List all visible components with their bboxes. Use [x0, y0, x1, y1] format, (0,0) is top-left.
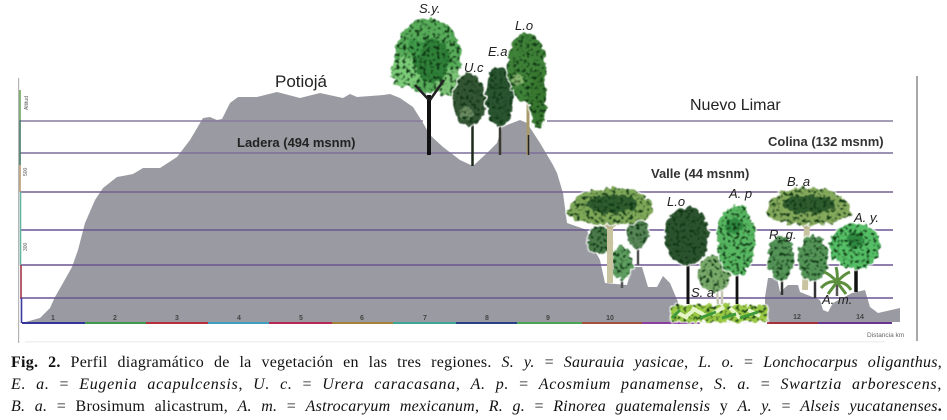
region label: Ladera: Ladera (494 msnm): [237, 135, 356, 150]
distance tick numbers: [51, 314, 864, 322]
caption line 3: B. a. = Brosimum alicastrum, A. m. = Astrocaryum mexicanum, R. g. = Rinorea guatemalensis y A. y. = Alseis yucatanenses.: [11, 398, 942, 415]
tree: umbrella canopy left: [568, 188, 654, 283]
tree: S. a.: [698, 256, 730, 304]
distance tick numbers: 8: [485, 315, 489, 322]
distance tick numbers: 5: [299, 315, 303, 322]
vertical axis: [20, 90, 22, 323]
distance tick numbers: 7: [423, 315, 427, 322]
tree: understorey right: [798, 235, 828, 298]
tree: U. c.: [453, 73, 485, 166]
species labels: [419, 1, 879, 307]
region label: Colina: Colina (132 msnm): [768, 134, 884, 149]
caption line 2: E. a. = Eugenia acapulcensis, U. c. = Urera caracasana, A. p. = Acosmium panamense, S. a. = Swartzia arborescens,: [11, 376, 942, 393]
axis labels: 300: [23, 242, 29, 251]
tree: E. a.: [486, 66, 514, 155]
distance tick numbers: 12: [793, 314, 801, 321]
species labels: A. y.: [853, 210, 879, 225]
distance axis segments: [22, 322, 892, 324]
tree: A. y.: [830, 223, 880, 292]
distance tick numbers: 2: [113, 315, 117, 322]
caption: [10, 354, 942, 415]
place label: Nuevo Limar: Nuevo Limar: [690, 97, 781, 114]
distance tick numbers: 1: [51, 315, 55, 322]
distance tick numbers: 4: [237, 315, 241, 322]
species labels: U.c: [464, 60, 484, 75]
species labels: S.y.: [419, 1, 440, 16]
elevation grid lines: [20, 121, 893, 298]
species labels: L.o: [667, 194, 685, 209]
species labels: E.a: [488, 44, 508, 59]
distance tick numbers: 9: [546, 315, 550, 322]
distance tick numbers: 14: [856, 314, 864, 321]
frame lines: [18, 76, 918, 343]
terrain profile: [22, 92, 900, 323]
tree: L. o. upper: [508, 33, 546, 155]
place label: Potiojá: Potiojá: [275, 72, 328, 91]
tree: L. o. valley: [665, 207, 709, 304]
region label: Valle: Valle (44 msnm): [651, 166, 749, 181]
distance tick numbers: 6: [360, 315, 364, 322]
axis labels: [23, 96, 30, 251]
tree: A. p.: [717, 205, 755, 304]
species labels: L.o: [515, 18, 533, 33]
tree: R. g.: [768, 235, 794, 295]
axis labels: 500: [23, 167, 29, 176]
axis labels: Altitud: [24, 96, 30, 110]
valley ground vegetation: [671, 305, 767, 322]
distance tick numbers: 3: [175, 315, 179, 322]
tree: S. y.: [391, 19, 462, 155]
tree: B. a.: [765, 188, 851, 290]
species labels: B. a: [787, 174, 810, 189]
tree: understorey left: [588, 215, 648, 288]
species labels: A. m.: [821, 292, 852, 307]
distance tick numbers: 10: [606, 315, 614, 322]
distance label: Distancia km: [867, 332, 904, 339]
species labels: S. a: [691, 285, 714, 300]
species labels: R. g.: [769, 227, 796, 242]
species labels: A. p: [728, 186, 752, 201]
tree: A. m. palm: [821, 267, 851, 296]
caption line 1: Fig. 2. Perfil diagramático de la vegetación en las tres regiones. S. y. = Saurauia yasicae, L. o. = Lonchocarpus oliganthus,: [11, 354, 942, 371]
